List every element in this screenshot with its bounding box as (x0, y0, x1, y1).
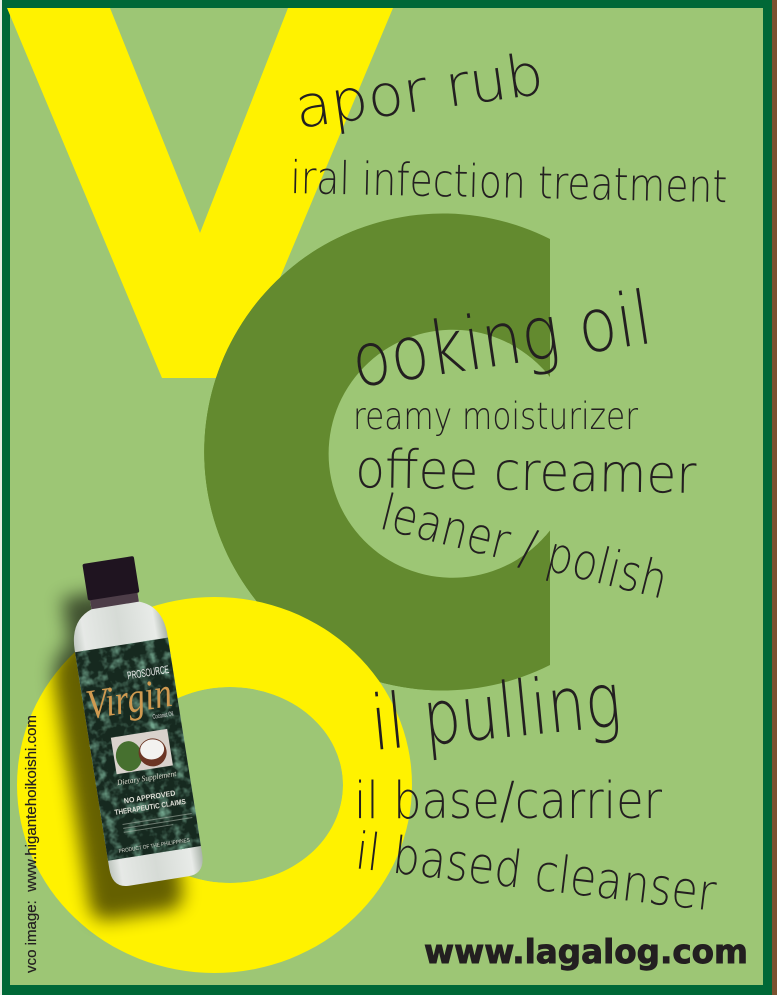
product of the philippines: PRODUCT OF THE PHILIPPINES (118, 838, 191, 855)
fine print (122, 813, 193, 833)
text: cooking oil: ooking oil (346, 275, 657, 405)
bottle cap (82, 556, 139, 601)
big letter V: V (50, 6, 352, 419)
image credit: vco image: www.higantehoikoishi.com (23, 715, 40, 973)
no approved therapeutic claims (112, 787, 186, 817)
text: creamy moisturizer: reamy moisturizer (353, 395, 639, 438)
coconut oil: Coconut Oil (152, 711, 174, 721)
text: vapor rub: apor rub (290, 40, 548, 142)
brown right edge (772, 0, 777, 995)
dietary supplement: Dietary Supplement (115, 769, 178, 787)
text: oil pulling: il pulling (367, 655, 625, 768)
brand name virgin: Virgin (83, 670, 175, 729)
big letter O: O (20, 584, 408, 975)
label foliage texture (75, 638, 201, 861)
bottle neck (90, 590, 139, 609)
bottle shadow (42, 587, 185, 922)
bottle label (75, 638, 201, 861)
text: coffee creamer: offee creamer (355, 439, 697, 506)
bottle glass body (68, 590, 205, 888)
text: cleaner / polish: leaner / polish (375, 483, 673, 611)
text: oil base/carrier: il base/carrier (354, 772, 662, 831)
website url: www.lagalog.com (424, 932, 748, 971)
bottle (62, 553, 205, 888)
brand name prosource: PROSOURCE (127, 664, 170, 682)
no approved therapeutic claims: THERAPEUTIC CLAIMS (114, 797, 186, 817)
left paper edge (0, 0, 2, 995)
text: oil based cleanser: il based cleanser (352, 822, 719, 924)
coconut photo (111, 729, 173, 774)
big letter C: C (173, 88, 628, 825)
no approved therapeutic claims: NO APPROVED (123, 788, 176, 805)
